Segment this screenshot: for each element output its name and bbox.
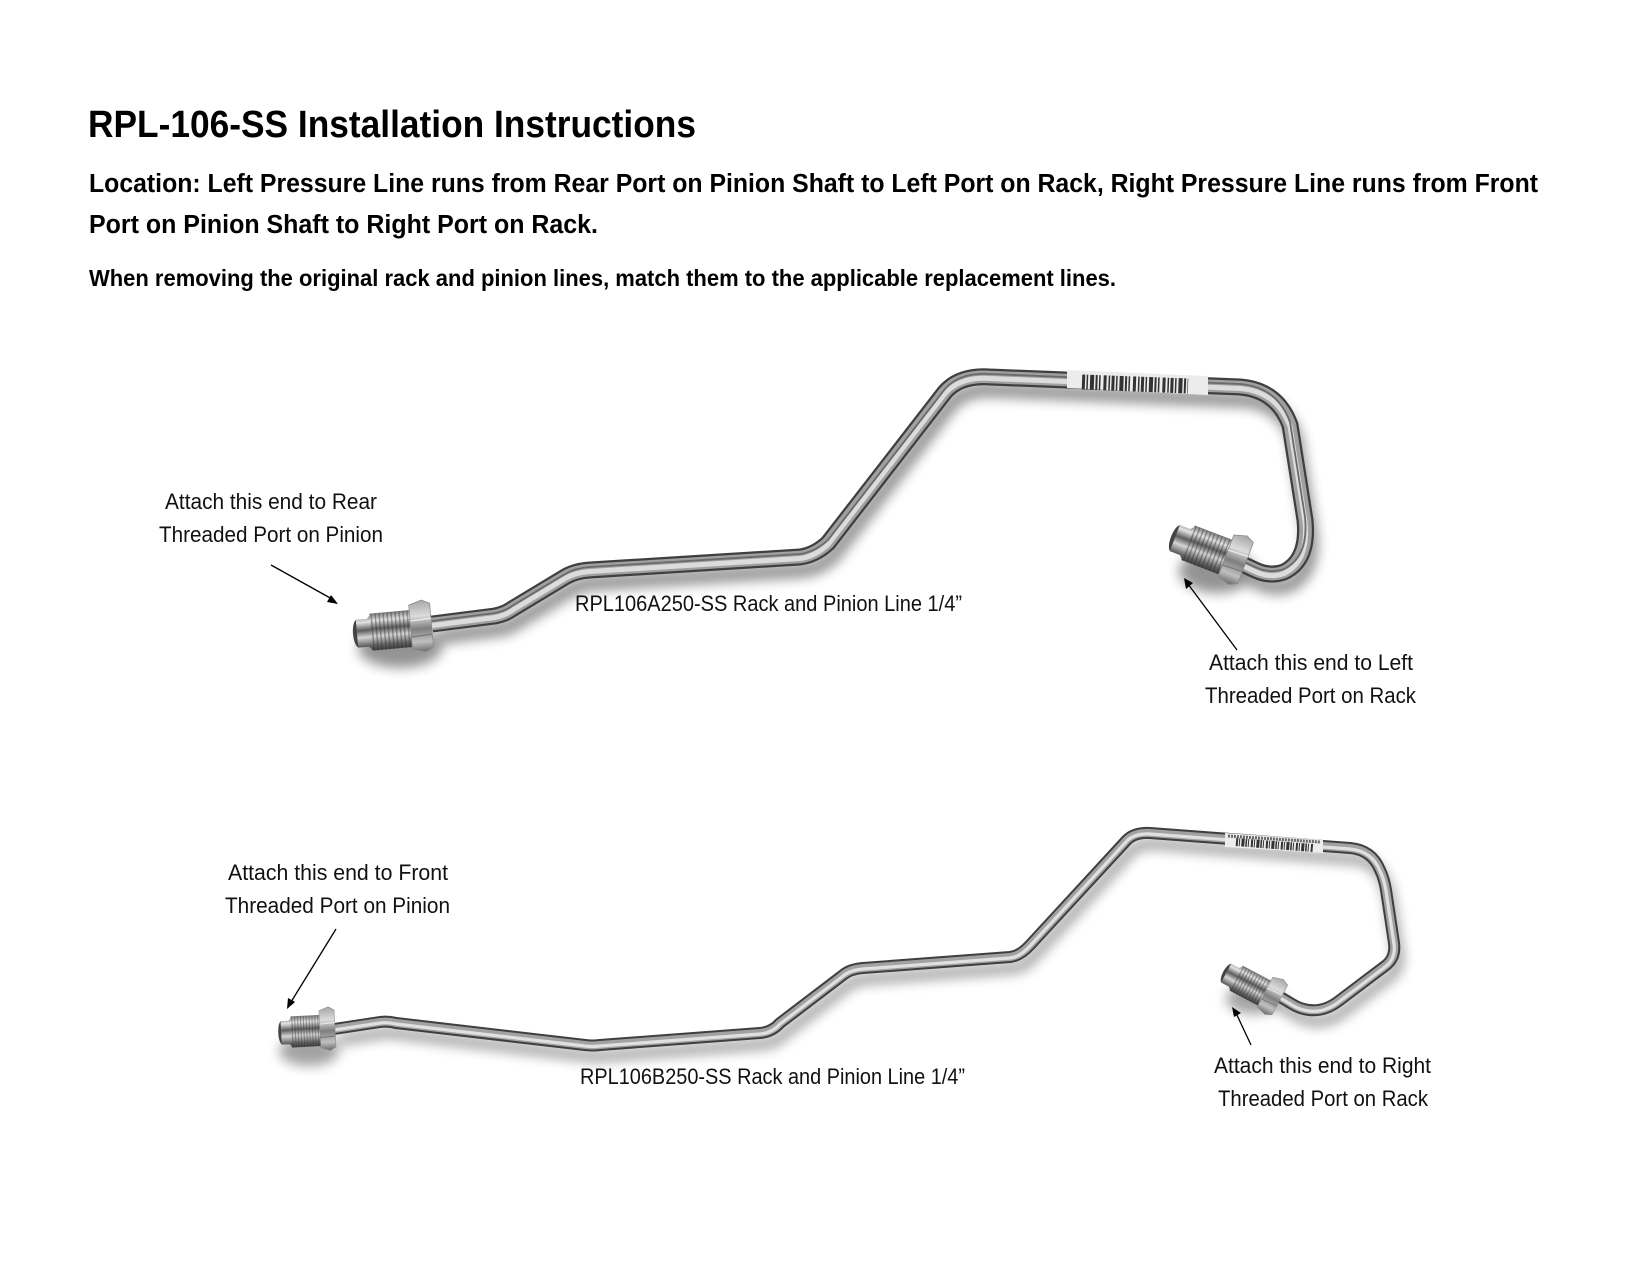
pressure line A photo <box>351 370 1311 668</box>
arrow: rear port <box>271 565 338 604</box>
removal note: When removing the original rack and pinion lines, match them to the applicable replacement lines. <box>89 265 1116 291</box>
fitting B left <box>277 1007 336 1053</box>
part label A: RPL106A250-SS Rack and Pinion Line 1/4” <box>575 591 962 616</box>
callout: front port: Attach this end to Front <box>228 860 448 885</box>
arrow: left port <box>1184 578 1237 650</box>
callout: right port: Threaded Port on Rack <box>1218 1086 1429 1111</box>
callout: right port <box>1214 1053 1431 1111</box>
barcode label A <box>1067 370 1208 395</box>
fitting B right <box>1215 953 1289 1017</box>
location text: Location: Left Pressure Line runs from Rear Port on Pinion Shaft to Left Port on Rack, Right Pressure Line runs from Front <box>89 170 1538 198</box>
barcode label B <box>1225 833 1323 853</box>
title: RPL-106-SS Installation Instructions <box>88 104 696 146</box>
location text: Port on Pinion Shaft to Right Port on Rack. <box>89 211 598 239</box>
callout: left port: Threaded Port on Rack <box>1205 683 1417 708</box>
pressure line B photo <box>277 833 1398 1066</box>
callout: front port <box>225 860 450 918</box>
callout: right port: Attach this end to Right <box>1214 1053 1431 1078</box>
callout: front port: Threaded Port on Pinion <box>225 893 450 918</box>
arrow: right port <box>1232 1007 1251 1045</box>
location text <box>89 170 1538 239</box>
fitting A left <box>351 599 434 658</box>
callout: rear port: Threaded Port on Pinion <box>159 522 383 547</box>
part label B: RPL106B250-SS Rack and Pinion Line 1/4” <box>580 1064 965 1089</box>
callout: rear port: Attach this end to Rear <box>165 489 377 514</box>
arrow: front port <box>287 929 336 1009</box>
callout: rear port <box>159 489 383 547</box>
fitting A right <box>1162 511 1255 587</box>
callout: left port: Attach this end to Left <box>1209 650 1413 675</box>
callout: left port <box>1205 650 1417 708</box>
